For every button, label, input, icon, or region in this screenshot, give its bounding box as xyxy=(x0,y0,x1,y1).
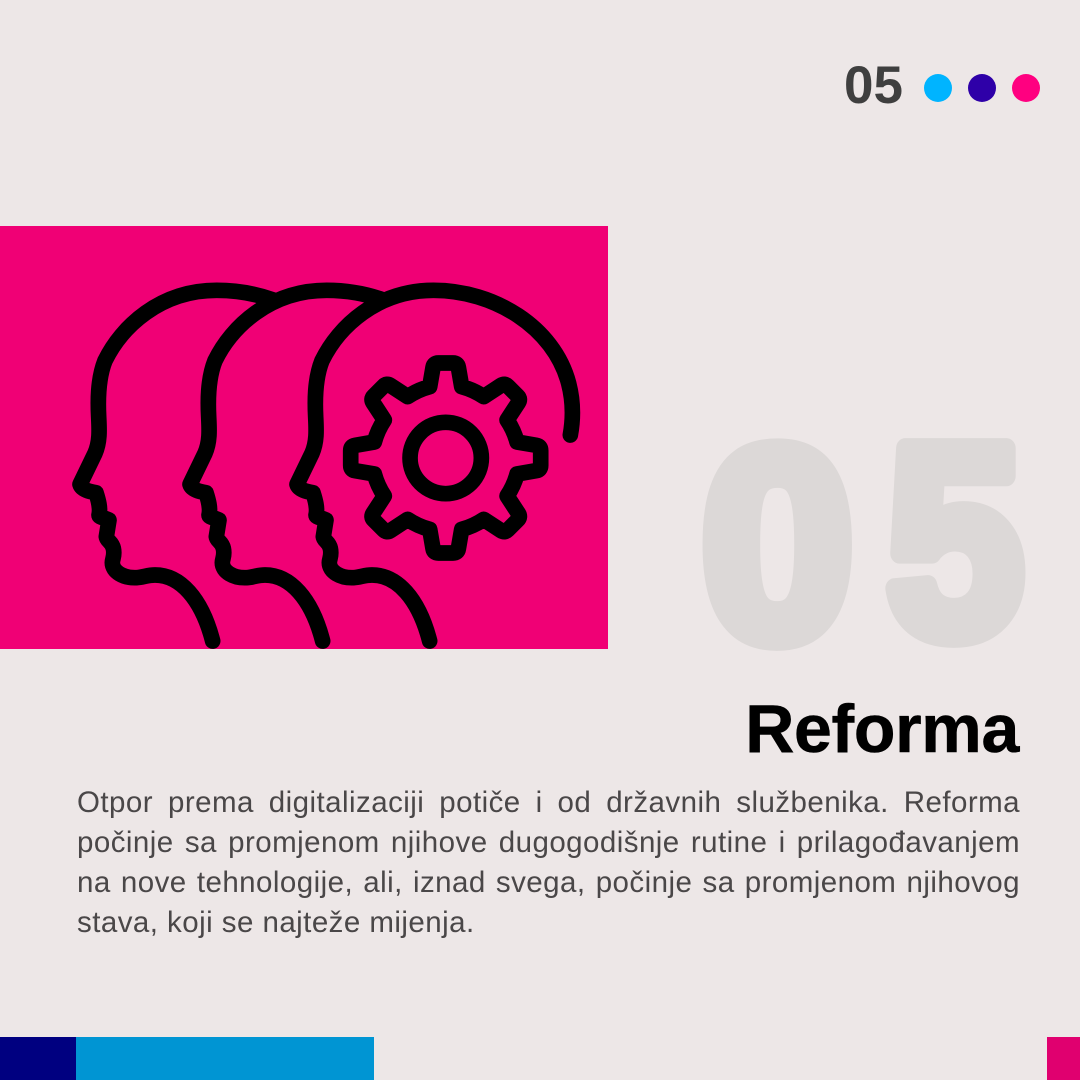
panel: pink image block with heads and gear icon xyxy=(0,226,608,649)
body text block: počinje sa promjenom njihove dugogodišnje rutine i prilagođavanjem xyxy=(77,826,1020,859)
footer bar: navy xyxy=(0,1037,76,1080)
body text block: Otpor prema digitalizaciji potiče i od državnih službenika. Reforma xyxy=(77,786,1020,819)
indicator dot: cyan xyxy=(924,74,952,102)
footer bar: blue xyxy=(76,1037,374,1080)
large watermark number 05 xyxy=(702,420,1026,670)
indicator dot: pink xyxy=(1012,74,1040,102)
page number top right: 05 xyxy=(844,56,903,115)
icon: gear xyxy=(351,363,541,553)
body text block xyxy=(77,786,1020,939)
heading: Reforma: Reforma xyxy=(745,691,1019,767)
body text block: stava, koji se najteže mijenja. xyxy=(77,906,475,939)
body text block: na nove tehnologije, ali, iznad svega, počinje sa promjenom njihovog xyxy=(77,866,1020,899)
indicator dot: indigo xyxy=(968,74,996,102)
icon: three head profiles with gear xyxy=(72,282,580,649)
footer bar: pink xyxy=(1047,1037,1080,1080)
